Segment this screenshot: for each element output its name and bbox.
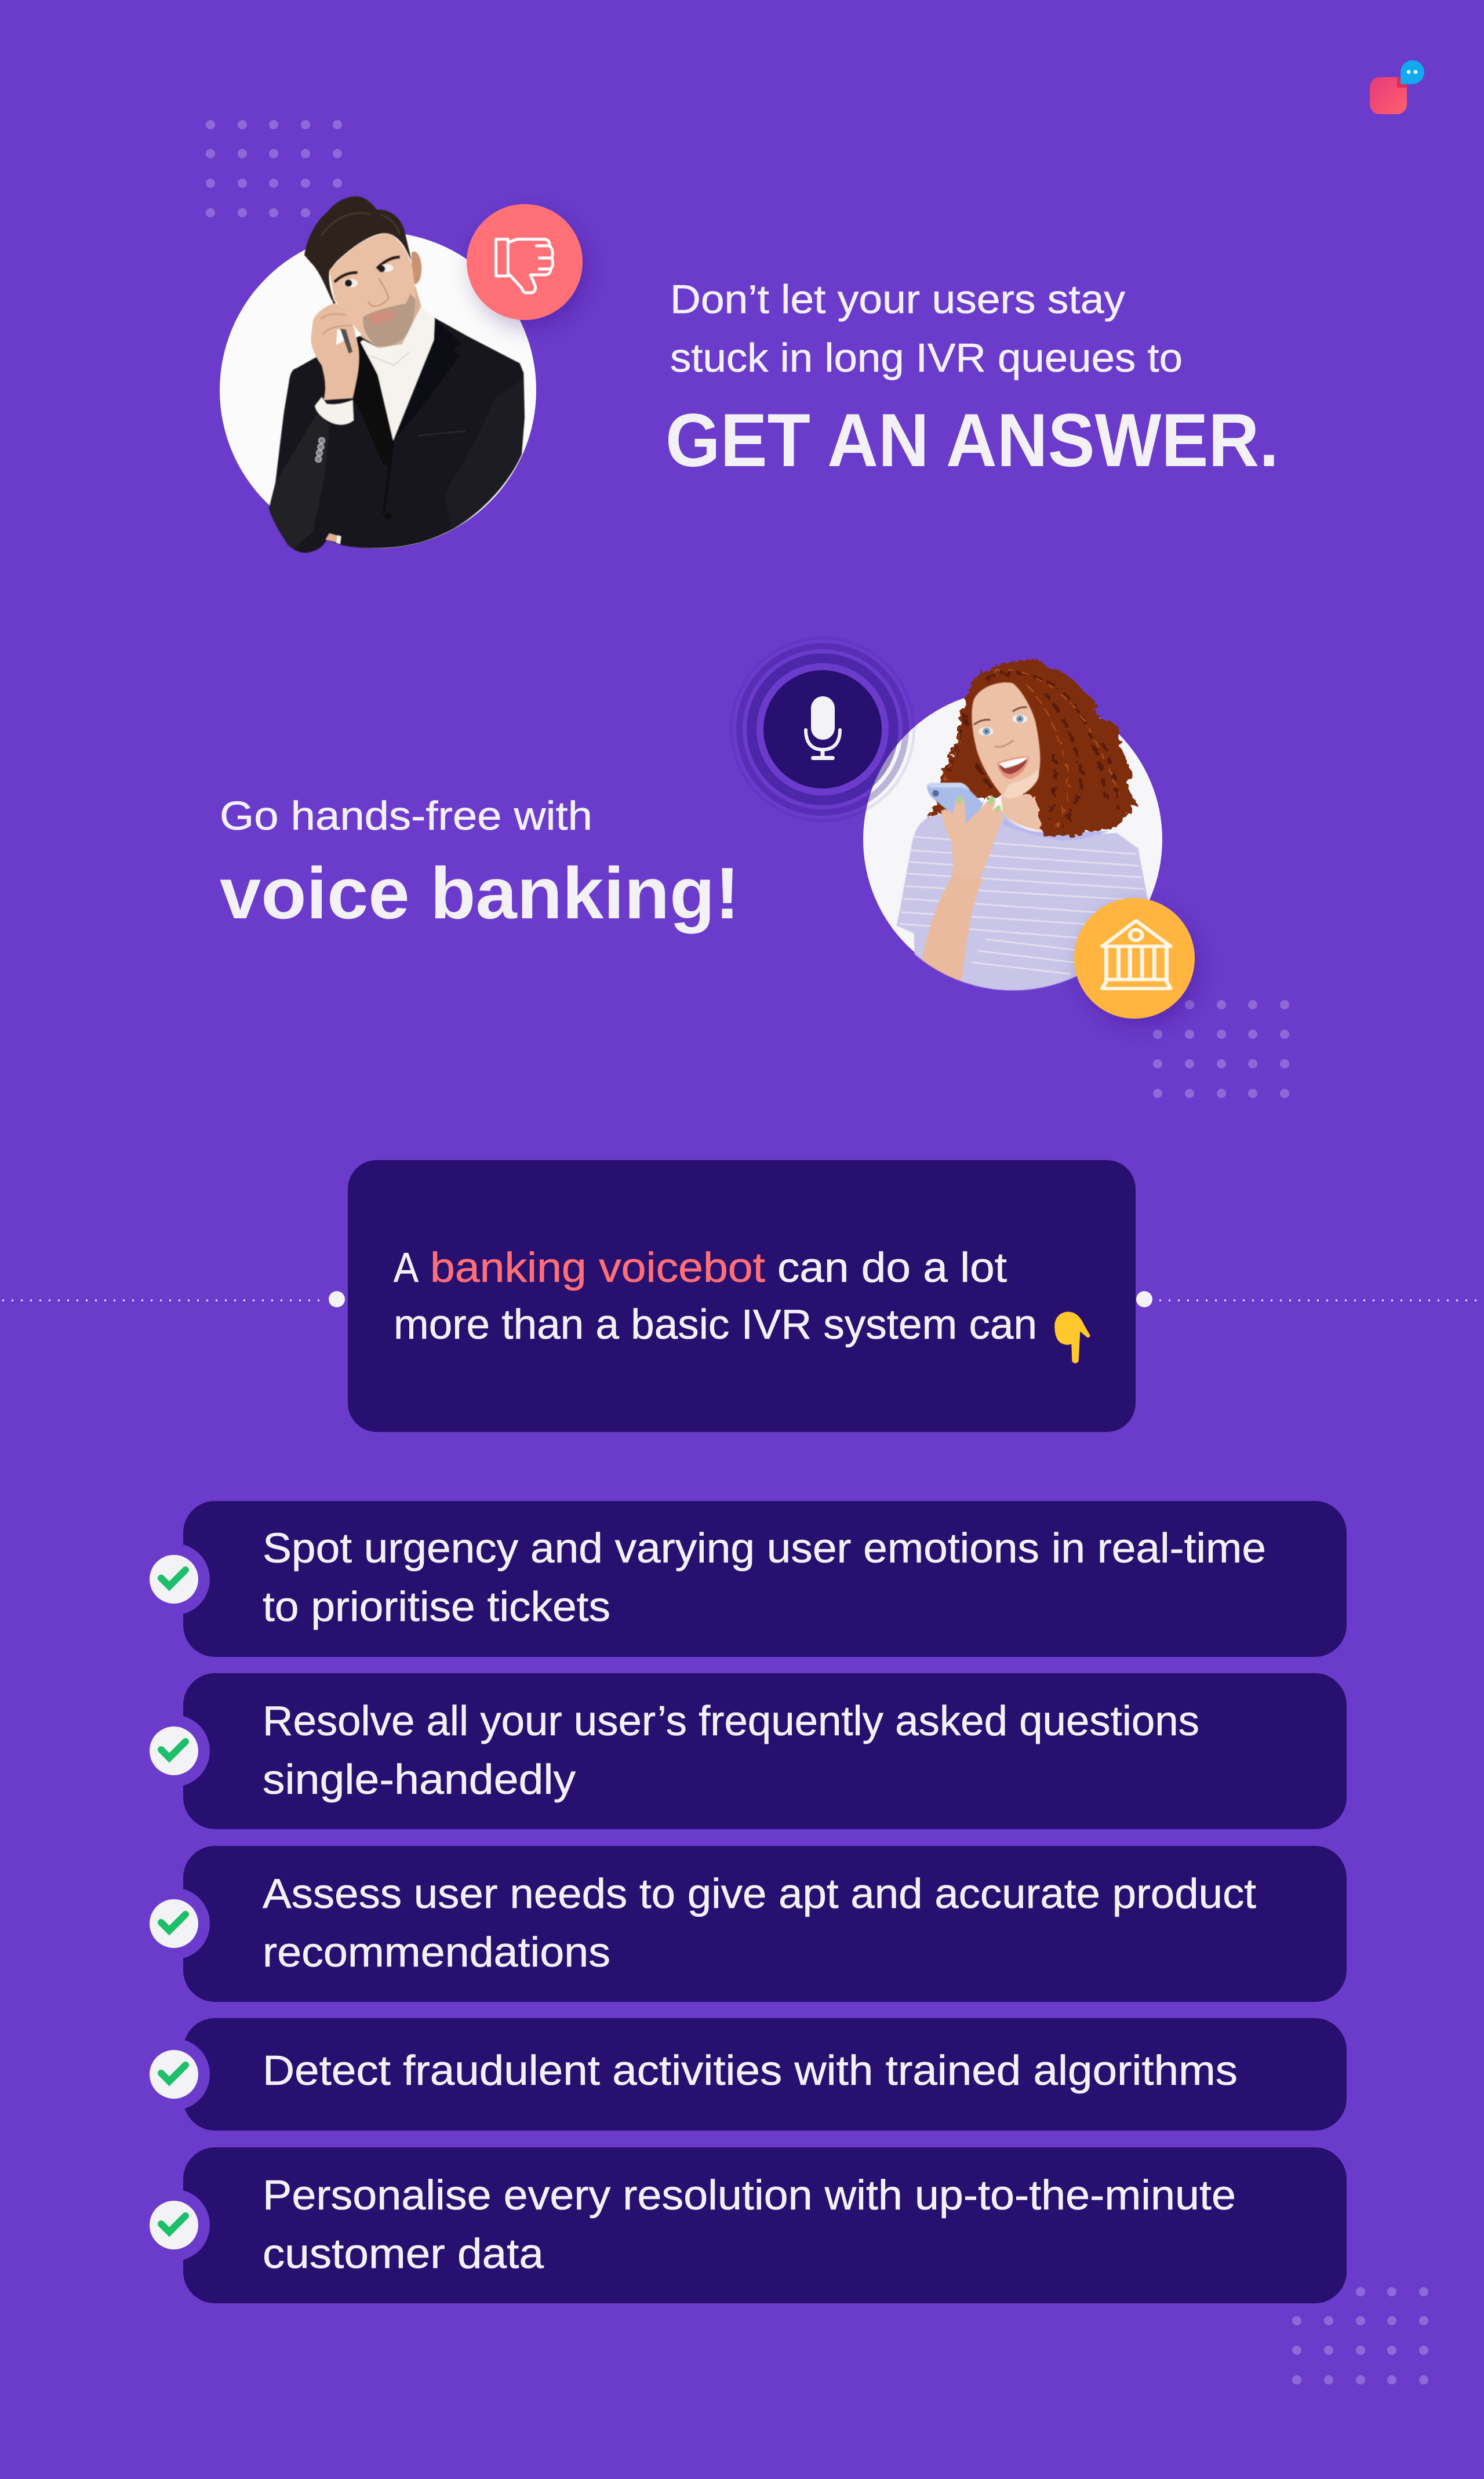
heading: IVR queues: Don’t let your users stay xyxy=(670,277,1125,322)
callout: banking voicebot: A xyxy=(394,1245,419,1291)
list item 1: Spot urgency and varying user emotions in real-time xyxy=(263,1525,1266,1572)
icon: pointing down hand xyxy=(1054,1312,1090,1364)
list item 2 xyxy=(138,1673,1347,1829)
heading: IVR queues: stuck in long IVR queues to xyxy=(670,335,1183,380)
list item 3: recommendations xyxy=(263,1929,610,1976)
callout: banking voicebot: more than a basic IVR system can xyxy=(394,1302,1037,1348)
heading: voice banking: voice banking! xyxy=(220,852,740,934)
list item 5 xyxy=(138,2147,1347,2303)
list item 4 xyxy=(138,2018,1347,2131)
heading: IVR queues: GET AN ANSWER. xyxy=(665,398,1279,482)
thumbs-down badge xyxy=(467,204,583,320)
list item 3 xyxy=(138,1846,1347,2002)
dotted connector: left xyxy=(2,1291,345,1307)
heading: voice banking: Go hands-free with xyxy=(220,793,592,838)
icon: check xyxy=(150,1899,198,1948)
photo: woman talking to phone xyxy=(863,659,1162,993)
list item 2: Resolve all your user’s frequently asked questions xyxy=(263,1698,1199,1744)
list item 4: Detect fraudulent activities with trained algorithms xyxy=(263,2048,1238,2094)
dot grid: top left xyxy=(206,120,342,217)
icon: microphone with sound rings xyxy=(732,638,914,821)
icon: bank building xyxy=(1103,921,1170,988)
callout: banking voicebot: can do a lot xyxy=(777,1245,1007,1291)
heading: IVR queues xyxy=(665,277,1279,482)
list item 1: to prioritise tickets xyxy=(263,1584,610,1630)
icon: check xyxy=(150,2201,198,2249)
list item 3: Assess user needs to give apt and accurate product xyxy=(263,1871,1256,1917)
callout: banking voicebot: banking voicebot xyxy=(430,1245,765,1291)
list item 2: single-handedly xyxy=(263,1757,576,1803)
photo: frustrated man on phone xyxy=(220,197,536,552)
logo xyxy=(1370,60,1424,114)
icon: thumbs down xyxy=(496,239,552,293)
list item 1 xyxy=(138,1501,1347,1657)
icon: check xyxy=(150,1726,198,1775)
list item 5: Personalise every resolution with up-to-the-minute xyxy=(263,2172,1236,2219)
bank badge xyxy=(1074,898,1195,1019)
icon: check xyxy=(150,2050,198,2099)
list item 5: customer data xyxy=(263,2231,544,2277)
dotted connector: right xyxy=(1136,1291,1484,1307)
heading: voice banking xyxy=(220,793,740,934)
callout: banking voicebot xyxy=(348,1160,1136,1432)
dot grid: bottom right xyxy=(1292,2287,1428,2385)
icon: check xyxy=(150,1555,198,1604)
dot grid: middle right xyxy=(1153,1000,1289,1098)
